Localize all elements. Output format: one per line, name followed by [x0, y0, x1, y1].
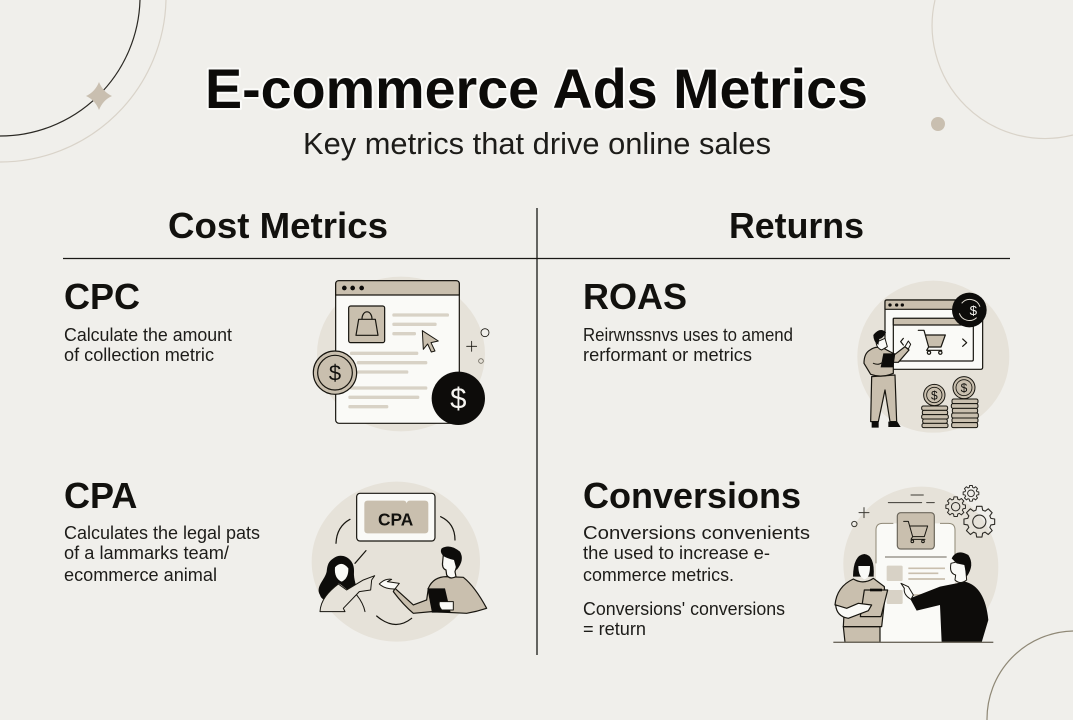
text: CPC description: of collection metric	[64, 345, 214, 365]
panel: Conversions	[583, 475, 998, 642]
panel: ROAS	[583, 276, 1009, 433]
coins	[922, 406, 948, 428]
panel: CPC	[64, 276, 489, 431]
panel: CPA	[64, 475, 487, 642]
heading: CPA: CPA	[64, 475, 137, 516]
column heading: Returns: Returns	[729, 205, 864, 246]
heading: ROAS: ROAS	[583, 276, 687, 317]
text: CPC description: Calculate the amount	[64, 325, 232, 345]
decoration: top-left arcs and star	[0, 0, 166, 162]
man	[910, 582, 988, 642]
icon: person with shopping page and coin stacks	[857, 281, 1009, 433]
man	[393, 577, 487, 613]
heading: Conversions: Conversions	[583, 475, 801, 516]
icon: product page with coins: $	[329, 360, 341, 385]
text: Conversions description: the used to increase e-	[583, 543, 770, 563]
icon: two people discussing CPA: CPA	[378, 509, 414, 529]
text: ROAS description: rerformant or metrics	[583, 345, 752, 365]
person	[871, 375, 897, 422]
icon: two people discussing CPA	[312, 482, 487, 642]
text: Conversions description: commerce metrics.	[583, 565, 734, 585]
text: CPA description: of a lammarks team/	[64, 543, 230, 563]
icon: person with shopping page and coin stacks: $	[931, 388, 938, 402]
woman	[853, 554, 874, 577]
decoration: bottom-right arc	[987, 631, 1073, 720]
icon: product page with coins: $	[450, 383, 466, 416]
text: CPA description: ecommerce animal	[64, 565, 217, 585]
icon: person with shopping page and coin stacks: $	[961, 381, 968, 395]
text: Conversions formula: = return	[583, 619, 646, 639]
text: ROAS description: Reirwnssnvs uses to amend	[583, 325, 793, 345]
column heading: Cost Metrics: Cost Metrics	[168, 205, 388, 246]
heading: CPC: CPC	[64, 276, 140, 317]
text: CPA description: Calculates the legal pats	[64, 523, 260, 543]
decoration: top-right arc and dot	[931, 0, 1073, 139]
gears	[946, 485, 995, 537]
title: E-commerce Ads Metrics	[205, 58, 868, 120]
subtitle: Key metrics that drive online sales	[303, 126, 771, 161]
icon: product page with coins	[313, 277, 489, 431]
woman	[319, 556, 357, 599]
icon: person with shopping page and coin stacks: $	[970, 303, 978, 318]
icon: team reviewing checkout page with gears	[833, 485, 998, 642]
text: Conversions description: Conversions convenients	[583, 523, 810, 543]
text: Conversions formula: Conversions' conversions	[583, 599, 785, 619]
